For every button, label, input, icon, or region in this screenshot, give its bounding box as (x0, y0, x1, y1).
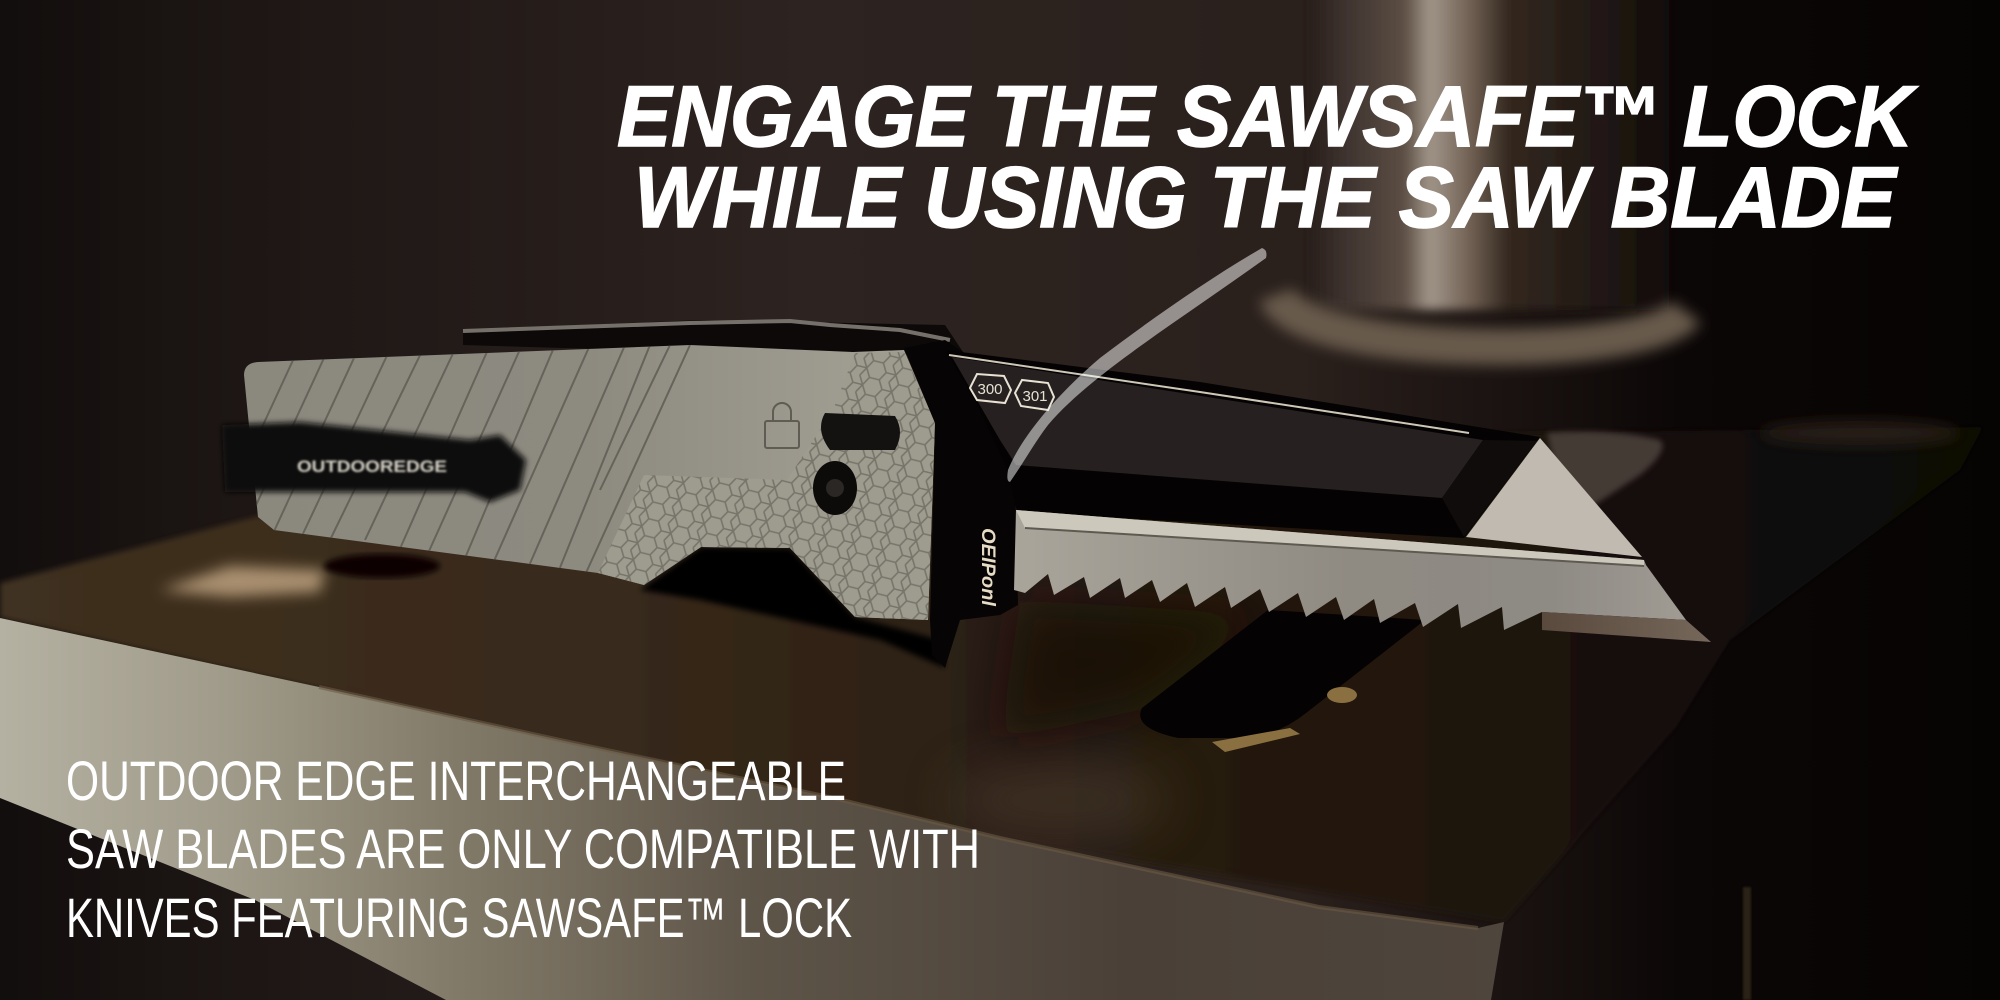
blurred steel cylinder (1276, 0, 1686, 347)
bolster (904, 340, 1018, 668)
knife spine (463, 320, 965, 355)
pointer stroke (1007, 248, 1266, 482)
table worn patch (160, 566, 325, 597)
black blade (945, 350, 1540, 538)
headline: ENGAGE THE SAWSAFE™ LOCK (617, 69, 1919, 165)
table top surface (0, 427, 1983, 922)
blade light triangle (1466, 438, 1642, 557)
knife (210, 320, 1711, 668)
compatibility note: KNIVES FEATURING SAWSAFE™ LOCK (66, 886, 852, 949)
compatibility note: SAW BLADES ARE ONLY COMPATIBLE WITH (66, 817, 980, 880)
part number badges (970, 374, 1054, 410)
gold wood patches (1212, 687, 1357, 752)
table front rim (319, 687, 1478, 928)
faint strip at right (1743, 887, 1751, 1000)
part number badges: 301 (1022, 388, 1048, 405)
clip logo: OUTDOOREDGE (297, 457, 447, 476)
hexagon grip (598, 352, 935, 620)
compatibility note (66, 749, 980, 949)
knife shadow (324, 554, 440, 578)
compatibility note: OUTDOOR EDGE INTERCHANGEABLE (66, 749, 846, 812)
table slot (1140, 610, 1425, 738)
handle (210, 345, 935, 620)
lock slider (821, 413, 900, 450)
blurred band on far table (1760, 421, 1960, 445)
blurred fin behind blade (1547, 432, 1662, 508)
table light patch (950, 760, 1170, 840)
bolster wordmark: OEIPonl (977, 528, 998, 607)
pivot screw (813, 461, 857, 515)
table front face (0, 618, 1504, 1000)
headline: WHILE USING THE SAW BLADE (634, 150, 1899, 246)
headline (617, 69, 1919, 246)
part number badges: 300 (977, 381, 1003, 398)
lock icon (765, 403, 799, 448)
pocket clip (222, 422, 526, 502)
shadow beneath teeth (1000, 600, 1268, 740)
saw blade with teeth (1014, 510, 1711, 642)
